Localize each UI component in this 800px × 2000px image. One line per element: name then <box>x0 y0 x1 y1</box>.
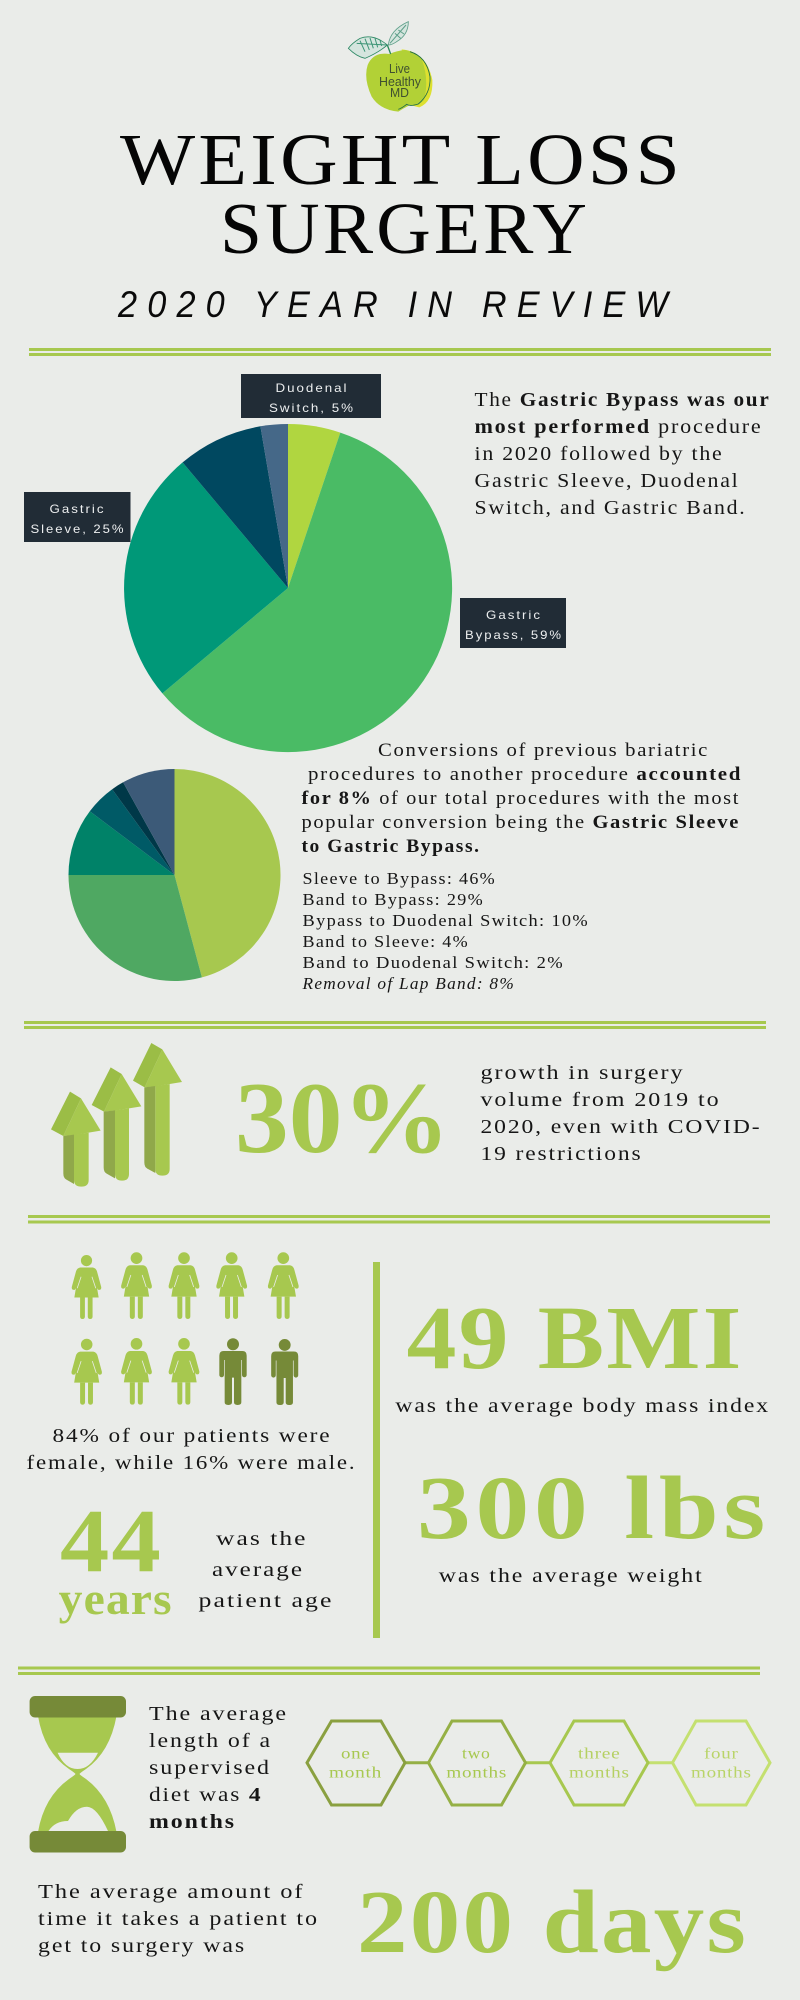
text: supervised diet length: supervised <box>149 1757 271 1779</box>
hexagon: two months: months <box>446 1764 507 1781</box>
text: conversions paragraph: Conversions of previous bariatric <box>378 740 709 761</box>
logo: Live Healthy MD apple: Live <box>389 61 410 76</box>
text: most performed procedure: in 2020 followed by the <box>474 443 724 465</box>
text: time to surgery: time it takes a patient to <box>38 1908 319 1930</box>
pie label: gastric bypass: Gastric <box>486 608 542 622</box>
icon: hourglass <box>30 1696 126 1852</box>
timeline: four month hexagons <box>307 1721 770 1805</box>
text: most performed procedure: Switch, and Gastric Band. <box>474 497 746 519</box>
hexagon: one month: one <box>341 1745 370 1762</box>
pie label: gastric bypass <box>460 598 566 648</box>
text: growth in surgery volume: 2020, even with COVID- <box>480 1116 762 1138</box>
text: most performed procedure: The Gastric Bypass was our <box>474 389 770 411</box>
title: SURGERY <box>220 188 590 269</box>
text: supervised diet length: The average <box>149 1703 288 1725</box>
text: most performed procedure: Gastric Sleeve, Duodenal <box>474 470 740 492</box>
stat: 44 years: 44 <box>60 1492 163 1591</box>
logo: Live Healthy MD apple: Healthy <box>379 74 421 89</box>
list: conversion percentages: Band to Duodenal Switch: 2% <box>302 953 564 972</box>
hexagon: two months: two <box>462 1745 490 1762</box>
pie label: duodenal switch <box>241 374 381 418</box>
hexagon: two months <box>428 1721 526 1805</box>
text: conversions paragraph: popular conversion being the Gastric Sleeve <box>302 812 740 833</box>
list: conversion percentages: Bypass to Duodenal Switch: 10% <box>302 911 589 930</box>
hexagon: four months <box>672 1721 770 1805</box>
hexagon: three months: months <box>569 1764 630 1781</box>
pie label: gastric bypass: Bypass, 59% <box>465 628 563 642</box>
list: conversion percentages <box>301 869 589 993</box>
text: growth in surgery volume: 19 restrictions <box>480 1143 642 1165</box>
text: supervised diet length: length of a <box>149 1730 272 1752</box>
logo: Live Healthy MD apple: MD <box>390 85 409 100</box>
list: conversion percentages: Band to Bypass: 29% <box>302 890 484 909</box>
text: time to surgery: The average amount of <box>38 1881 304 1903</box>
text: growth in surgery volume: volume from 2019 to <box>480 1089 720 1111</box>
icon grid: patients by gender <box>71 1252 299 1405</box>
stat: 30%: 30% <box>235 1062 450 1175</box>
text: conversions paragraph: to Gastric Bypass. <box>302 836 480 857</box>
list: conversion percentages: Band to Sleeve: 4% <box>302 932 469 951</box>
text: gender split <box>26 1425 356 1474</box>
text: average body mass index: was the average body mass index <box>395 1395 770 1417</box>
text: gender split: 84% of our patients were <box>52 1425 332 1447</box>
icon: three rising arrows <box>51 1043 182 1187</box>
pie chart: 2020 procedures <box>124 424 452 752</box>
logo: Live Healthy MD apple <box>348 22 432 112</box>
text: gender split: female, while 16% were male. <box>26 1452 356 1474</box>
pie label: duodenal switch: Duodenal <box>276 381 348 395</box>
text: conversions paragraph: procedures to another procedure accounted <box>308 764 742 785</box>
pie chart: conversions <box>68 769 281 981</box>
stat: 200 days: 200 days <box>357 1873 748 1972</box>
text: conversions paragraph <box>302 740 742 857</box>
text: average patient age: patient age <box>198 1590 334 1612</box>
pie label: duodenal switch: Switch, 5% <box>269 401 355 415</box>
text: average patient age: average <box>212 1559 304 1581</box>
hexagon: three months: three <box>578 1745 620 1762</box>
text: supervised diet length: diet was 4 <box>149 1784 262 1806</box>
stat: 300 lbs: 300 lbs <box>417 1459 770 1558</box>
text: growth in surgery volume <box>480 1062 762 1165</box>
pie label: gastric sleeve: Gastric <box>50 502 106 516</box>
stat: 44 years <box>59 1492 173 1624</box>
list: conversion percentages: Removal of Lap Band: 8% <box>301 974 515 993</box>
hexagon: one month: month <box>329 1764 382 1781</box>
stat: 44 years: years <box>59 1574 173 1624</box>
text: conversions paragraph: for 8% of our total procedures with the most <box>302 788 740 809</box>
list: conversion percentages: Sleeve to Bypass: 46% <box>302 869 496 888</box>
text: supervised diet length <box>149 1703 288 1833</box>
text: time to surgery <box>38 1881 319 1957</box>
text: most performed procedure <box>474 389 770 519</box>
hexagon: four months: months <box>691 1764 752 1781</box>
hexagon: four months: four <box>704 1745 739 1762</box>
subtitle: 2020 YEAR IN REVIEW <box>117 284 678 325</box>
text: supervised diet length: months <box>149 1811 236 1833</box>
title <box>120 119 683 269</box>
text: average patient age: was the <box>216 1528 308 1550</box>
hexagon: three months <box>550 1721 648 1805</box>
title: WEIGHT LOSS <box>120 119 683 200</box>
text: growth in surgery volume: growth in surgery <box>480 1062 684 1084</box>
hexagon: one month <box>307 1721 405 1805</box>
stat: 49 BMI: 49 BMI <box>407 1289 744 1388</box>
text: most performed procedure: most performed procedure <box>474 416 762 438</box>
pie label: gastric sleeve: Sleeve, 25% <box>30 522 125 536</box>
text: average weight: was the average weight <box>439 1565 704 1587</box>
text: average patient age <box>198 1528 334 1612</box>
pie label: gastric sleeve <box>24 492 130 542</box>
text: time to surgery: get to surgery was <box>38 1935 246 1957</box>
